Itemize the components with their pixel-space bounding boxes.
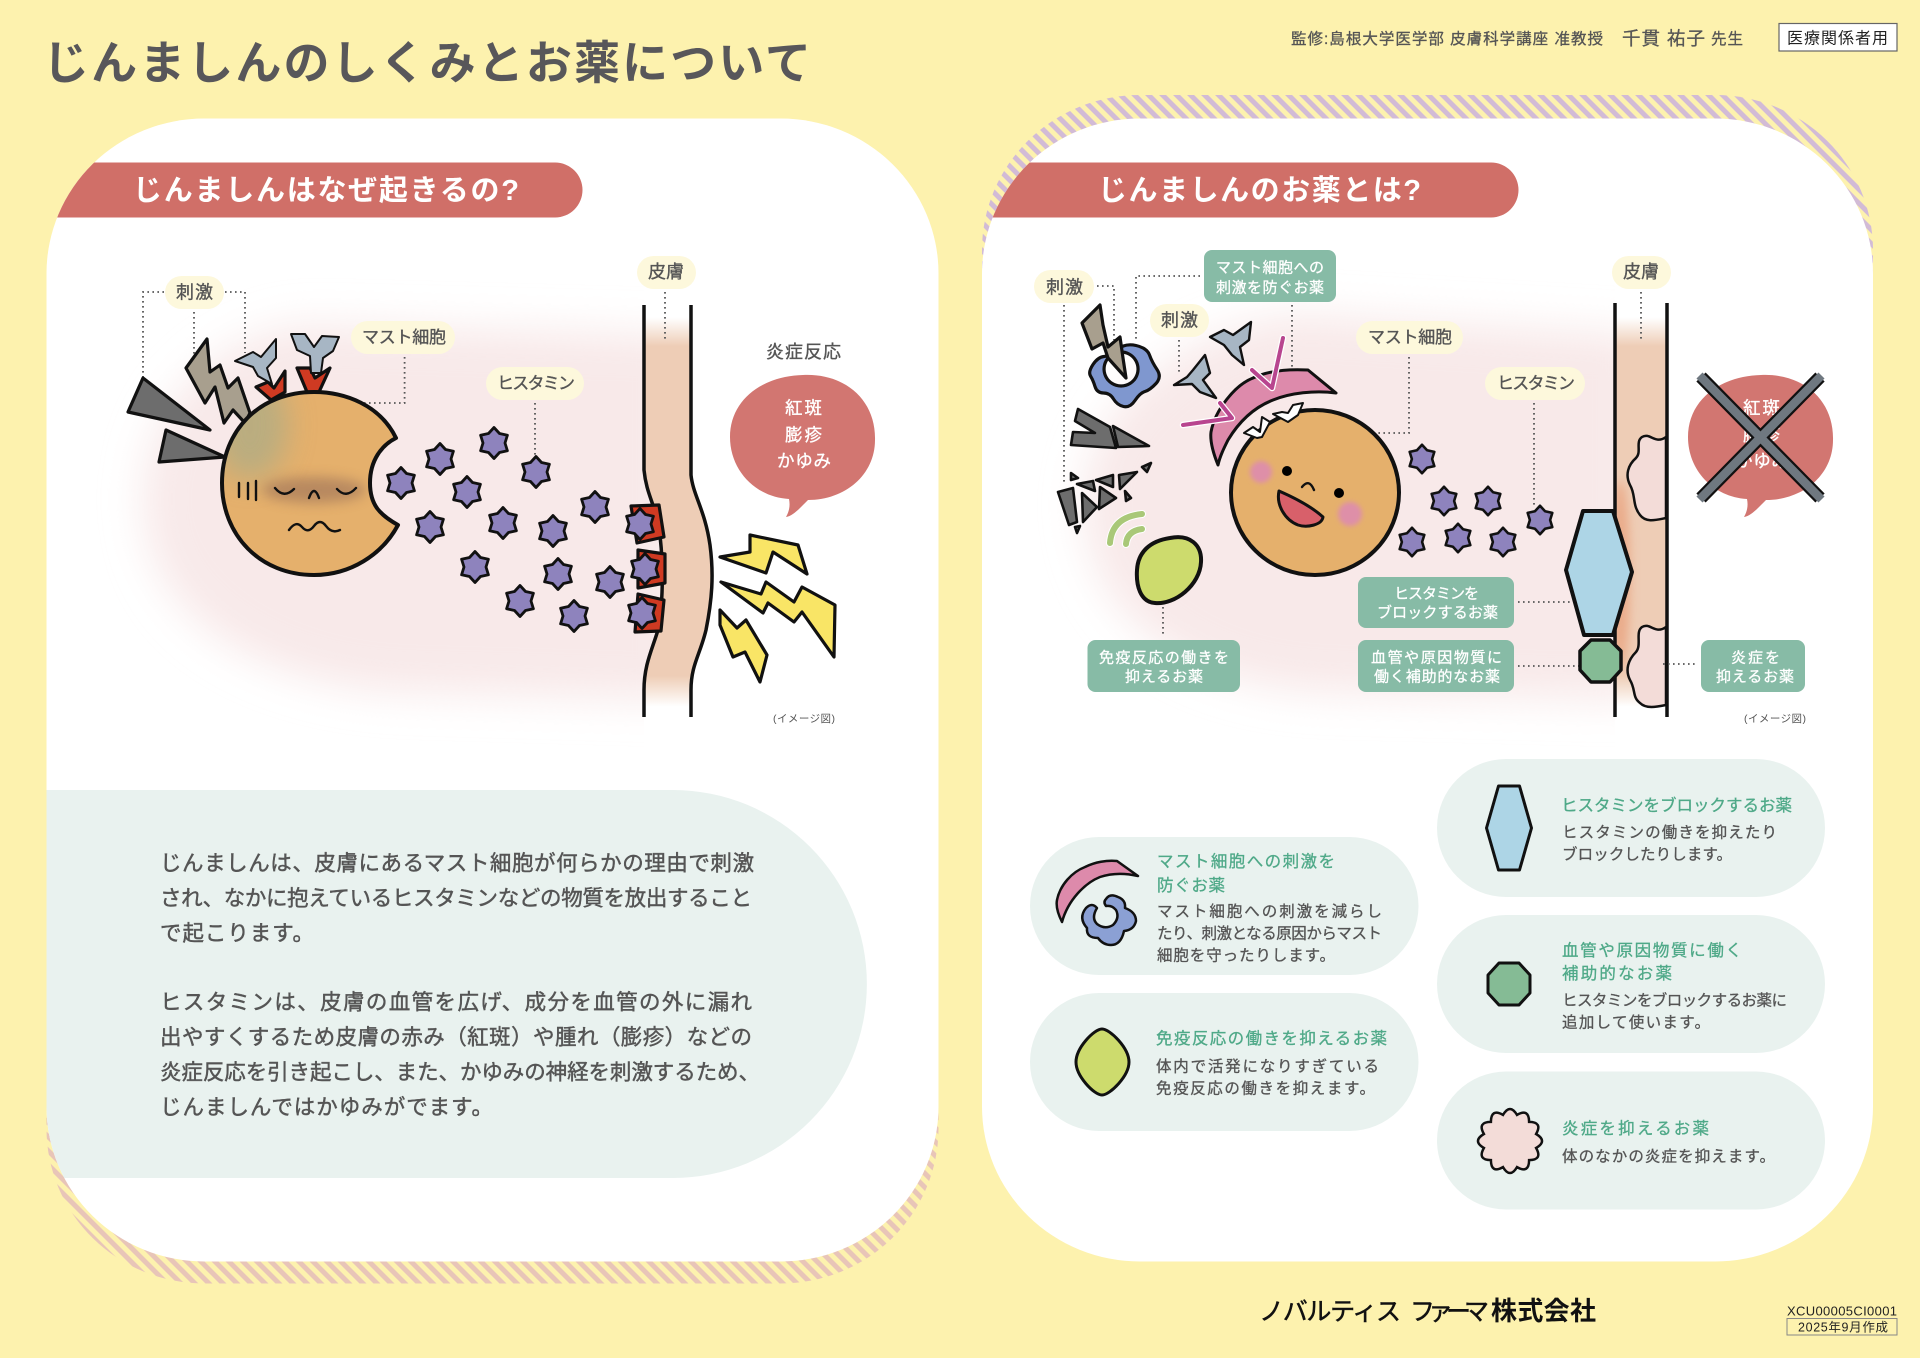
label: skin (1612, 256, 1671, 289)
company logo text: ファーマ (1410, 1298, 1489, 1326)
card: suppresses immune response: 免疫反応の働きを抑えるお薬 (1156, 1029, 1387, 1048)
card: blocks histamine: ヒスタミンの働きを抑えたり (1562, 824, 1777, 842)
icon: crescent and gear (1057, 861, 1138, 945)
skin layer (1610, 303, 1667, 717)
company logo text (1259, 1296, 1596, 1326)
company logo text: 株式会社 (1491, 1296, 1596, 1326)
creation date: 2025年9月作成 (1798, 1320, 1888, 1334)
label: mast cell (1356, 321, 1463, 354)
heading bar: left (40, 162, 582, 218)
green octagon: auxiliary drug (1580, 640, 1621, 682)
panel background: left (46, 118, 938, 1262)
icon: green octagon (1488, 963, 1530, 1005)
caption: image diagram: (イメージ図) (1744, 713, 1806, 725)
card: prevents stimulation of mast cells (1030, 837, 1418, 975)
label: mast cell: マスト細胞 (362, 328, 446, 347)
heading bar: right (975, 162, 1518, 218)
explanation block: 出やすくするため皮膚の赤み（紅斑）や腫れ（膨疹）などの (160, 1026, 752, 1050)
card: suppresses inflammation (1437, 1072, 1825, 1210)
label: histamine (1485, 367, 1585, 400)
blue hexagon: antihistamine (1566, 511, 1632, 635)
explanation block: じんましんは、皮膚にあるマスト細胞が何らかの理由で刺激 (160, 852, 754, 876)
explanation block: で起こります。 (160, 922, 314, 946)
badge: for medical professionals: 医療関係者用 (1787, 30, 1888, 48)
callout: auxiliary drug: 働く補助的なお薬 (1374, 668, 1500, 686)
pink background glow (1084, 315, 1640, 700)
speech bubble: symptoms crossed out: かゆみ (1735, 451, 1789, 471)
diagram: how medicines act (1034, 250, 1833, 725)
callout: suppresses immune response (1088, 640, 1240, 692)
explanation block: じんましんではかゆみがでます。 (160, 1096, 493, 1120)
label: histamine: ヒスタミン (1497, 374, 1575, 393)
icon: pink flower (1478, 1109, 1542, 1173)
explanation block: され、なかに抱えているヒスタミンなどの物質を放出すること (160, 886, 752, 910)
card: auxiliary drug: ヒスタミンをブロックするお薬に (1562, 990, 1787, 1010)
mast cell: unhappy (220, 390, 400, 577)
label: stimulus (165, 276, 224, 309)
company logo text: ノバルティス (1259, 1298, 1401, 1326)
card: suppresses inflammation: 体のなかの炎症を抑えます。 (1562, 1148, 1775, 1166)
card: prevents stimulation of mast cells: 防ぐお薬 (1157, 876, 1225, 895)
speech bubble: symptoms (730, 375, 875, 517)
stripe shadow: right panel (982, 95, 1873, 1238)
stripe shadow: left panel (46, 141, 938, 1284)
label: skin (637, 256, 696, 289)
card: suppresses immune response: 体内で活発になりすぎている (1156, 1058, 1379, 1076)
label: mast cell (351, 321, 455, 354)
card: auxiliary drug: 血管や原因物質に働く (1562, 941, 1742, 960)
explanation block (40, 790, 867, 1178)
speech bubble: symptoms: かゆみ (777, 451, 831, 471)
callout: auxiliary drug (1358, 640, 1514, 692)
title: じんましんのしくみとお薬について (43, 37, 811, 89)
callout: blocks histamine (1358, 577, 1514, 628)
callout: prevents mast cell stimulation: 刺激を防ぐお薬 (1216, 280, 1324, 296)
label: stimulus: 刺激 (176, 282, 213, 302)
callout: prevents mast cell stimulation (1204, 250, 1336, 302)
label: histamine (486, 367, 584, 400)
callout: blocks histamine: ヒスタミンを (1394, 586, 1479, 602)
card: suppresses immune response (1030, 993, 1418, 1131)
leader lines (143, 292, 665, 460)
immune cell (1137, 537, 1201, 603)
panel background: right (982, 118, 1873, 1262)
supervisor credit: 先生 (1711, 30, 1743, 48)
label: inflammatory response: 炎症反応 (766, 342, 841, 362)
icon: green lemon (1076, 1029, 1129, 1095)
callout: blocks histamine: ブロックするお薬 (1377, 604, 1498, 622)
speech bubble: symptoms crossed out (1688, 375, 1833, 517)
label: histamine: ヒスタミン (497, 374, 575, 393)
explanation block: ヒスタミンは、皮膚の血管を広げ、成分を血管の外に漏れ (160, 990, 752, 1014)
pink crescent drug (1183, 338, 1336, 465)
card: auxiliary drug: 補助的なお薬 (1562, 964, 1672, 983)
document code: XCU00005CI0001 (1787, 1304, 1897, 1318)
card: prevents stimulation of mast cells: マスト細胞への刺激を (1157, 852, 1335, 871)
label: skin: 皮膚 (648, 262, 684, 282)
speech bubble: symptoms crossed out: 紅斑 (1743, 398, 1780, 418)
card: prevents stimulation of mast cells: 細胞を守ったりします。 (1157, 946, 1335, 964)
panel: medicines for hives (975, 95, 1873, 1262)
panel: why hives occur (40, 118, 938, 1284)
leader lines (1064, 276, 1696, 666)
callout: suppresses immune response: 免疫反応の働きを (1099, 650, 1229, 666)
supervisor credit (1291, 28, 1743, 49)
label: mast cell: マスト細胞 (1368, 328, 1452, 347)
explanation block: 炎症反応を引き起こし、また、かゆみの神経を刺激するため、 (160, 1060, 760, 1084)
icon: blue hexagon (1486, 786, 1532, 870)
card: blocks histamine: ヒスタミンをブロックするお薬 (1561, 795, 1792, 815)
label: stimulus 1: 刺激 (1046, 278, 1083, 298)
diagram: mechanism of hives (128, 256, 875, 725)
card: auxiliary drug (1437, 915, 1825, 1053)
free receptors (1174, 322, 1251, 398)
histamine stars (1400, 445, 1552, 556)
callout: suppresses inflammation: 抑えるお薬 (1716, 668, 1794, 686)
irritants: triangles and bolt (128, 339, 250, 462)
card: suppresses immune response: 免疫反応の働きを抑えます。 (1156, 1080, 1375, 1098)
label: stimulus 2: 刺激 (1161, 310, 1198, 330)
skin layer (644, 305, 712, 717)
label: skin: 皮膚 (1623, 262, 1659, 282)
creation date (1787, 1318, 1897, 1335)
inflamed pink background glow (144, 325, 680, 700)
immune signal arcs (1110, 514, 1142, 544)
card: blocks histamine (1437, 759, 1825, 897)
mast cell: happy (1231, 410, 1399, 575)
badge: for medical professionals (1779, 24, 1897, 51)
label: stimulus 1 (1034, 270, 1094, 303)
card: suppresses inflammation: 炎症を抑えるお薬 (1562, 1119, 1709, 1138)
caption: image diagram: (イメージ図) (773, 713, 835, 725)
card: prevents stimulation of mast cells: たり、刺激となる原因からマスト (1157, 924, 1382, 942)
blue drug gear blocking the irritant (1082, 305, 1159, 407)
receptors on blood vessel (627, 505, 665, 632)
nerve lightning (720, 535, 835, 682)
speech bubble: symptoms: 膨疹 (785, 425, 822, 445)
speech bubble: symptoms: 紅斑 (785, 398, 822, 418)
callout: auxiliary drug: 血管や原因物質に (1371, 648, 1502, 666)
callout: suppresses inflammation: 炎症を (1731, 650, 1780, 666)
activated receptors (235, 334, 339, 400)
callout: suppresses inflammation (1701, 640, 1805, 692)
card: auxiliary drug: 追加して使います。 (1562, 1014, 1710, 1032)
heading bar: left: じんましんはなぜ起きるの? (133, 174, 519, 207)
irritants: broken triangles (1058, 409, 1151, 533)
card: blocks histamine: ブロックしたりします。 (1562, 844, 1732, 864)
speech bubble: symptoms crossed out: 膨疹 (1743, 425, 1780, 445)
card: prevents stimulation of mast cells: マスト細胞への刺激を減らし (1157, 902, 1382, 920)
heading bar: right: じんましんのお薬とは? (1098, 174, 1421, 207)
label: stimulus 2 (1150, 304, 1209, 337)
supervisor credit: 千貫 祐子 (1622, 28, 1705, 49)
histamine stars (388, 428, 623, 632)
supervisor credit: 監修:島根大学医学部 皮膚科学講座 准教授 (1291, 30, 1603, 48)
callout: prevents mast cell stimulation: マスト細胞への (1216, 260, 1324, 276)
callout: suppresses immune response: 抑えるお薬 (1125, 668, 1203, 686)
